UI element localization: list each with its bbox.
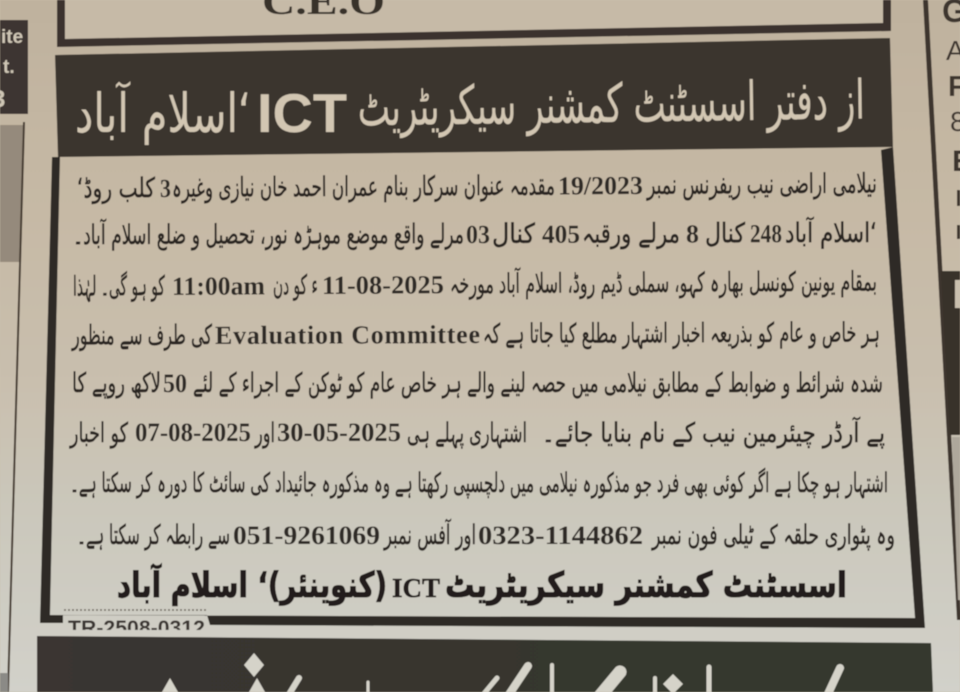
right column text fragments — [942, 0, 960, 239]
line 8 — [77, 519, 895, 551]
top box: C.E.O frame — [57, 0, 891, 47]
left column: dark advert fragment: ite — [1, 27, 23, 48]
line 2: ‘اسلام آباد — [785, 217, 877, 249]
line 6: 30-05-2025 — [277, 418, 401, 447]
line 4: Evaluation Committee — [215, 320, 480, 350]
signature line: ICT — [392, 573, 440, 603]
line 5: 50 — [163, 369, 187, 398]
signature line: اسسٹنٹ کمشنر سیکریٹریٹ — [445, 566, 847, 606]
line 1: 19/2023 — [558, 171, 643, 201]
line 6: اشتہاری پہلے ہی — [407, 418, 527, 449]
signature line: (کنوینئر)‘ اسلام آباد — [117, 563, 387, 606]
line 6 — [69, 417, 885, 449]
line 8: اور آفس نمبر — [383, 519, 476, 551]
left column rule — [7, 122, 25, 692]
notice frame — [40, 147, 925, 628]
header text: ICT: ICT — [257, 82, 347, 144]
left column: dark advert fragment — [0, 20, 28, 114]
line 2: 03 — [466, 220, 490, 249]
line 8: 0323-1144862 — [478, 521, 643, 550]
line 3 — [73, 266, 877, 303]
header text: Islamabad: ‘اسلام آباد — [75, 81, 251, 145]
line 6: اور — [254, 418, 275, 449]
reference code: TR-2508-0312 — [68, 617, 205, 640]
line 1: کلب روڈ‘ — [77, 173, 155, 205]
line 3: کو ہو گی۔ لہٰذا — [73, 270, 165, 303]
signature line — [117, 563, 847, 606]
line 2: 248 — [750, 219, 782, 248]
line 4 — [71, 318, 880, 351]
left column: dark advert fragment: t. — [3, 57, 15, 78]
line 6: کو اخبار — [69, 418, 128, 449]
line 1: 3 — [160, 174, 171, 203]
right column dark block — [941, 271, 960, 600]
line 5: لاکھ روپے کا — [72, 368, 161, 399]
line 4: کی طرف سے منظور — [71, 320, 212, 351]
line 2: کنال — [705, 218, 745, 249]
line 3: 11:00am — [172, 271, 265, 301]
line 3: ء کو دن — [273, 270, 318, 301]
line 6: پے آرڈر چیئرمین نیب کے نام بنایا جائے۔ — [542, 417, 885, 449]
line 2: کنال — [492, 219, 535, 250]
left column: grey photo block — [0, 125, 23, 262]
line 2: 8 — [686, 219, 699, 248]
bottom dark panel with cropped headline tops — [37, 636, 933, 692]
line 6: 07-08-2025 — [135, 418, 251, 447]
left column halftone corner — [0, 673, 8, 692]
header band — [55, 38, 893, 157]
line 2: مرلے واقع موضع موہڑہ نور، تحصیل و ضلع اسلام آباد۔ — [73, 218, 464, 251]
line 2: 405 — [542, 220, 580, 249]
line 8: 051-9261069 — [233, 521, 380, 550]
line 1: مقدمہ عنوان سرکار بنام عمران احمد خان نیازی وغیرہ — [172, 171, 555, 204]
notice body text — [69, 169, 895, 551]
line 3: 11-08-2025 — [322, 270, 444, 300]
right column rule — [923, 0, 960, 620]
line 2: مرلے ورقبہ — [582, 218, 680, 250]
line 8: سے رابطہ کر سکتا ہے۔ — [77, 520, 230, 551]
